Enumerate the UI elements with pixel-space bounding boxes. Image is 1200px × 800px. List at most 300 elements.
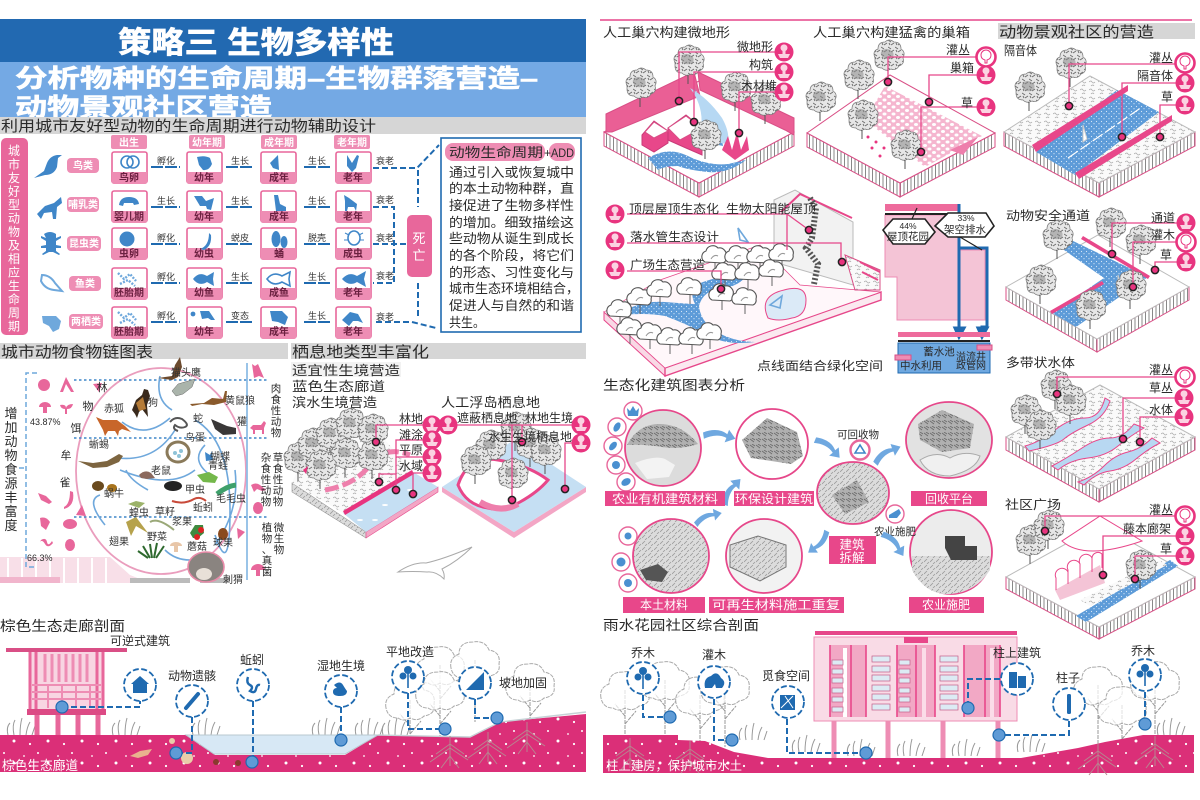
callout: flat land: 平地改造 bbox=[386, 645, 434, 659]
arrows and stage labels: 衰老 bbox=[376, 155, 394, 166]
water bands bbox=[1025, 398, 1160, 485]
circle: fertilising bbox=[910, 510, 992, 594]
trees bbox=[1016, 510, 1156, 589]
stage headers: 老年期 bbox=[337, 136, 367, 149]
iso block: blue corridor: 滩涂 bbox=[399, 427, 423, 442]
title: 策略三 生物多样性 bbox=[118, 27, 394, 60]
apartment building bbox=[814, 633, 1017, 721]
flow arrows bbox=[693, 430, 909, 559]
fertilising small label: 农业施肥 bbox=[874, 525, 916, 538]
water bbox=[648, 86, 746, 172]
y axis label: 增 bbox=[4, 406, 18, 421]
description heading: + bbox=[544, 146, 551, 160]
samara bbox=[126, 517, 148, 536]
water bbox=[615, 264, 755, 343]
heading: habitat types: 栖息地类型丰富化 bbox=[292, 343, 429, 361]
right axis labels: 性 bbox=[261, 473, 271, 486]
nest bbox=[167, 442, 189, 462]
habitat subheadings: 适宜性生境营造 bbox=[292, 363, 400, 378]
blue drain pipes with arrows bbox=[955, 204, 987, 337]
habitat subheadings: 滨水生境营造 bbox=[292, 395, 377, 410]
row: fish bbox=[41, 268, 371, 299]
panel: community plaza: 草 bbox=[1160, 542, 1172, 556]
arrows and stage labels: 生长 bbox=[231, 155, 249, 166]
row: fish: 胚胎期 bbox=[114, 286, 144, 299]
death pill: 死 bbox=[412, 231, 426, 246]
callout: elevated drainage 33%: 33% bbox=[957, 213, 975, 223]
hedgehog bbox=[188, 552, 224, 582]
labels: 生物太阳能屋顶 bbox=[726, 201, 816, 216]
callout lines bbox=[643, 679, 1145, 753]
animal labels: 翅果 bbox=[109, 535, 129, 548]
trophic grid bbox=[19, 363, 269, 580]
vertical label strip: 城 bbox=[8, 144, 20, 158]
cistern: 中水利用 bbox=[900, 359, 942, 372]
right axis labels: 食 bbox=[273, 462, 284, 475]
icon: roof bbox=[606, 204, 624, 224]
barriers bbox=[1032, 85, 1172, 179]
lizard bbox=[78, 454, 123, 468]
icons bbox=[1176, 54, 1194, 72]
panel: micro terrain: 木材堆 bbox=[741, 79, 777, 93]
fox bbox=[96, 417, 131, 436]
iso block base bbox=[1006, 385, 1195, 502]
y axis label: 加 bbox=[4, 420, 18, 435]
animal labels: 黄鼠狼 bbox=[225, 394, 255, 407]
section heading: 棕色生态走廊剖面 bbox=[0, 618, 125, 634]
right axis labels: 食 bbox=[271, 393, 282, 406]
callout: animal remains: 动物遗骸 bbox=[168, 669, 216, 683]
caterpillar bbox=[217, 485, 236, 494]
row: fish: 幼鱼 bbox=[194, 286, 214, 299]
callout: stilt building: 柱上建筑 bbox=[993, 645, 1041, 660]
frog bbox=[197, 472, 218, 483]
arrows and stage labels: 生长 bbox=[231, 271, 249, 282]
arrows and stage labels: 生长 bbox=[157, 195, 175, 206]
right axis labels: 性 bbox=[271, 404, 281, 417]
callout: roof garden 44% bbox=[883, 208, 935, 244]
panel: rainwater section diagram bbox=[757, 204, 994, 373]
description body: 城市生态环境相结合， bbox=[449, 281, 579, 296]
arrows and stage labels: 衰老 bbox=[376, 311, 394, 322]
right axis labels: 动 bbox=[273, 485, 283, 497]
y axis label: 食 bbox=[4, 462, 18, 477]
demolition label: 建筑 bbox=[839, 537, 865, 552]
right axis labels: 菌 bbox=[262, 566, 272, 578]
circle: recycling platform bbox=[906, 402, 992, 478]
earthworm bbox=[172, 498, 206, 503]
heading: lifecycle section: 利用城市友好型动物的生命周期进行动物辅助设计 bbox=[1, 117, 376, 135]
heading: habitat types bbox=[291, 343, 586, 361]
right axis labels: 食 bbox=[261, 462, 272, 475]
arrows and stage labels: 生长 bbox=[308, 195, 326, 206]
callout: pillar: 柱子 bbox=[1056, 670, 1080, 685]
callout: elevated drainage 33% bbox=[935, 213, 994, 250]
icon: downpipe bbox=[606, 232, 624, 250]
description body: 些动物从诞生到成长 bbox=[449, 231, 574, 246]
icons bbox=[1176, 506, 1194, 526]
labels: 广场生态营造 bbox=[630, 258, 705, 272]
row: mammals: 幼年 bbox=[194, 210, 214, 223]
arrows and stage labels: 变态 bbox=[231, 310, 249, 321]
callout: tree left: 乔木 bbox=[631, 646, 655, 660]
labels: 灌丛 bbox=[1149, 51, 1173, 65]
arrows and stage labels: 孵化 bbox=[157, 155, 175, 166]
label bars: 回收平台 bbox=[925, 491, 973, 506]
panel: rain garden section bbox=[601, 618, 1194, 775]
icons bbox=[774, 42, 794, 62]
iso block: floating island: 遮蔽栖息地 bbox=[457, 410, 517, 425]
iso block: floating island: 水生生境栖息地 bbox=[488, 429, 572, 444]
iso block: floating island: 林地生境 bbox=[525, 410, 573, 425]
animal labels: 蚯蚓 bbox=[193, 502, 213, 514]
row: amphibians bbox=[42, 307, 371, 338]
row: birds bbox=[34, 152, 371, 184]
callout: pillar bbox=[993, 670, 1085, 741]
row: birds: 鸟卵 bbox=[119, 171, 139, 184]
heading: 多带状水体 bbox=[1006, 356, 1076, 370]
leaders bbox=[679, 52, 775, 133]
stage headers: 成年期 bbox=[264, 136, 294, 149]
panel: animal landscape community bbox=[998, 23, 1195, 197]
small material icons bbox=[604, 402, 904, 592]
panel: micro terrain bbox=[603, 25, 794, 197]
dashed links to death bbox=[373, 145, 439, 328]
row: amphibians: 胚胎期 bbox=[114, 325, 144, 338]
panel: ecological building diagram bbox=[603, 378, 992, 613]
animal labels: 野菜 bbox=[147, 531, 167, 543]
panel: multi-band water: 草丛 bbox=[1149, 381, 1173, 395]
arrows and stage labels: 衰老 bbox=[376, 232, 394, 243]
cistern bbox=[895, 332, 992, 373]
vertical label strip: 型 bbox=[8, 198, 20, 212]
animal labels: 浆果 bbox=[172, 515, 192, 528]
arrows and stage labels bbox=[151, 155, 394, 322]
callout: slope bbox=[459, 667, 547, 724]
panel: animal landscape community: 草 bbox=[1161, 90, 1173, 104]
reversible building bbox=[6, 648, 127, 735]
row: insects: 幼虫 bbox=[194, 247, 214, 260]
callout: tree left bbox=[627, 646, 676, 723]
panel: animal safe passage bbox=[1006, 208, 1196, 352]
row: birds: 老年 bbox=[343, 171, 363, 184]
arrows and stage labels: 孵化 bbox=[157, 271, 175, 282]
stage headers bbox=[111, 135, 370, 149]
mushroom bbox=[170, 542, 182, 552]
panel: food chain chart bbox=[0, 357, 285, 586]
row: fish: 老年 bbox=[343, 286, 363, 299]
right axis labels: 真 bbox=[262, 554, 272, 567]
ring characters bbox=[60, 380, 108, 489]
iso block: blue corridor bbox=[284, 408, 442, 538]
heading bbox=[998, 23, 1195, 41]
right axis labels: 物 bbox=[271, 426, 281, 439]
death pill: 亡 bbox=[412, 248, 426, 263]
circle: demolition bbox=[817, 462, 889, 524]
right axis labels: 生 bbox=[274, 532, 284, 545]
ground and water bbox=[0, 712, 586, 772]
snake bbox=[170, 418, 187, 431]
labels: 通道 bbox=[1151, 211, 1175, 225]
labels: 灌丛 bbox=[1149, 363, 1173, 377]
label bars: 农业施肥 bbox=[922, 598, 970, 612]
row: amphibians: 幼年 bbox=[194, 325, 214, 338]
leaders bbox=[627, 214, 841, 289]
arrows and stage labels: 孵化 bbox=[157, 310, 175, 321]
right axis labels: 微 bbox=[274, 521, 285, 534]
caption: 点线面结合绿化空间 bbox=[757, 358, 883, 373]
trees bbox=[1026, 208, 1156, 329]
animal labels: 猫头鹰 bbox=[171, 366, 201, 379]
grass seed bbox=[150, 521, 174, 530]
right axis labels: 草 bbox=[273, 452, 283, 464]
callout: roof garden 44%: 屋顶花园 bbox=[887, 230, 929, 243]
icons bbox=[1176, 368, 1194, 386]
heading: 生态化建筑图表分析 bbox=[603, 378, 745, 393]
panel: community plaza bbox=[1005, 497, 1195, 639]
callout: elevated drainage 33%: 架空排水 bbox=[944, 223, 986, 236]
ground bbox=[603, 735, 1194, 775]
bridge backdrop bbox=[0, 557, 230, 583]
arrows and stage labels: 生长 bbox=[308, 155, 326, 166]
arrows and stage labels: 蜕皮 bbox=[231, 232, 249, 243]
pergola bbox=[1055, 565, 1105, 600]
iso block base bbox=[1004, 76, 1195, 197]
owl bbox=[158, 357, 182, 380]
snail bbox=[92, 481, 104, 491]
callout: shrub: 灌木 bbox=[702, 648, 726, 662]
heading: food chain bbox=[0, 343, 288, 361]
animal labels: 甲虫 bbox=[185, 484, 205, 496]
subtitle: 动物景观社区营造 bbox=[15, 94, 272, 122]
y axis label: 动 bbox=[4, 434, 18, 449]
callout: shrub bbox=[698, 648, 738, 746]
panel: raptor nest box bbox=[806, 25, 996, 197]
iso block base bbox=[1006, 525, 1195, 639]
habitat subheadings: 人工浮岛栖息地 bbox=[441, 395, 540, 410]
row: mammals bbox=[37, 191, 371, 223]
houses bbox=[642, 115, 702, 155]
y axis label: 物 bbox=[4, 448, 18, 463]
percent 43.87: 43.87% bbox=[30, 417, 61, 427]
description body: 的形态、习性变化与 bbox=[449, 265, 574, 280]
heading: lifecycle section bbox=[0, 117, 586, 135]
panel: lifecycle description bbox=[441, 138, 581, 332]
row: mammals: 成年 bbox=[269, 210, 289, 223]
iso block: blue corridor: 水域 bbox=[399, 459, 423, 473]
vertical label strip: 生 bbox=[8, 279, 20, 293]
row: insects: 成虫 bbox=[343, 247, 363, 260]
arrows and stage labels: 生长 bbox=[308, 310, 326, 321]
right axis labels: 杂 bbox=[261, 452, 271, 464]
vertical label strip: 相 bbox=[8, 252, 20, 266]
panel: brown corridor section bbox=[0, 618, 586, 773]
section trees bbox=[7, 642, 554, 762]
beetle bbox=[164, 481, 182, 491]
callout lines bbox=[62, 693, 497, 762]
pink consumer icons right bbox=[250, 364, 266, 576]
heading: 动物景观社区的营造 bbox=[999, 24, 1154, 41]
badger bbox=[211, 419, 236, 435]
ring characters: 牟 bbox=[60, 448, 72, 462]
y axis label: 富 bbox=[4, 504, 18, 519]
right axis labels: 物 bbox=[274, 543, 284, 556]
right axis labels: 性 bbox=[273, 473, 283, 486]
ring characters: 雀 bbox=[60, 476, 70, 489]
animal labels: 鸟蛋 bbox=[185, 431, 205, 444]
label bars: 环保设计建筑 bbox=[735, 491, 813, 506]
building bbox=[774, 190, 853, 285]
description body bbox=[449, 165, 579, 330]
wall bbox=[606, 72, 794, 135]
planting bbox=[1080, 560, 1167, 606]
leaders bbox=[1045, 516, 1176, 579]
panel: habitat diagrams bbox=[284, 362, 590, 579]
animal labels: 蘑菇 bbox=[187, 540, 207, 553]
description body: 的增加。细致描绘这 bbox=[449, 215, 574, 230]
building silhouette bbox=[885, 215, 985, 320]
ring characters: 林 bbox=[96, 380, 108, 394]
trees bbox=[601, 662, 1185, 767]
label bars: 农业有机建筑材料 bbox=[612, 491, 718, 506]
circle: local materials bbox=[633, 519, 709, 593]
description heading: 动物生命周期 bbox=[449, 145, 543, 160]
row: insects: 昆虫类 bbox=[69, 237, 99, 250]
description body: 的各个阶段，将它们 bbox=[449, 248, 574, 263]
arrows and stage labels: 生长 bbox=[231, 195, 249, 206]
trees bbox=[626, 45, 781, 159]
labels bbox=[629, 201, 816, 272]
windows bbox=[832, 656, 958, 712]
row: birds: 鸟类 bbox=[73, 159, 93, 172]
ring characters: 物 bbox=[82, 399, 94, 413]
wild herb bbox=[138, 543, 164, 558]
demolition label: 拆解 bbox=[839, 550, 865, 565]
animal labels: 草籽 bbox=[155, 506, 175, 518]
callout: flat land bbox=[386, 645, 451, 735]
pink resource icons left bbox=[38, 377, 77, 551]
animal labels: 獾 bbox=[237, 416, 247, 428]
vertical label strip: 物 bbox=[8, 225, 20, 239]
bird shapes bbox=[738, 228, 782, 308]
vertical label strip: 命 bbox=[8, 292, 20, 306]
leaders bbox=[888, 57, 977, 152]
top pink rule bbox=[600, 19, 1192, 21]
row: birds: 成年 bbox=[269, 171, 289, 184]
food cycle ring bbox=[76, 368, 246, 574]
arrows and stage labels: 衰老 bbox=[376, 270, 394, 281]
labels: 顶层屋顶生态化 bbox=[629, 202, 719, 216]
callout: wetland bbox=[317, 658, 365, 746]
right axis labels: 植 bbox=[262, 521, 273, 534]
habitat subheadings bbox=[291, 362, 540, 410]
buried fauna bbox=[130, 738, 241, 766]
right axis labels: 动 bbox=[271, 416, 281, 428]
trees bbox=[806, 40, 921, 169]
vertical label strip: 应 bbox=[8, 264, 20, 280]
iso block base bbox=[1006, 235, 1189, 352]
iso block: blue corridor: 平原 bbox=[399, 443, 423, 457]
labels: 灌丛 bbox=[1149, 503, 1173, 517]
stage headers: 幼年期 bbox=[192, 136, 222, 149]
animal labels: 蝗虫 bbox=[129, 506, 149, 519]
row: mammals: 老年 bbox=[343, 210, 363, 223]
animal labels: 球果 bbox=[213, 536, 233, 549]
circle: agricultural materials bbox=[625, 410, 701, 486]
panel: combined greening block bbox=[604, 190, 881, 376]
iso block base bbox=[807, 75, 995, 197]
vertical label strip: 友 bbox=[8, 171, 20, 185]
heading: food chain: 城市动物食物链图表 bbox=[1, 344, 153, 361]
subtitle: 分析物种的生命周期–生物群落营造– bbox=[15, 64, 538, 93]
habitat subheadings: 蓝色生态廊道 bbox=[292, 379, 385, 394]
dog bbox=[132, 389, 150, 418]
demolition label bbox=[829, 536, 876, 565]
leaders bbox=[1069, 64, 1176, 137]
roof layers bbox=[885, 204, 958, 215]
animals bbox=[78, 357, 236, 582]
row: mammals: 哺乳类 bbox=[68, 198, 98, 211]
callout: reversible building bbox=[56, 633, 170, 713]
heading: 人工巢穴构建猛禽的巢箱 bbox=[813, 25, 970, 40]
vertical label strip: 期 bbox=[8, 320, 20, 334]
animal labels: 狗 bbox=[148, 396, 158, 409]
callout: reversible building: 可逆式建筑 bbox=[110, 633, 170, 648]
row: fish: 成鱼 bbox=[269, 286, 289, 299]
mouse bbox=[139, 471, 155, 479]
labels: 灌丛 bbox=[946, 43, 970, 57]
heading: 动物安全通道 bbox=[1006, 208, 1091, 223]
callout: slope: 坡地加固 bbox=[499, 676, 547, 690]
callout: tree right bbox=[1129, 644, 1161, 730]
row: insects: 虫卵 bbox=[119, 247, 139, 260]
trees bbox=[1011, 370, 1086, 449]
panel: animal safe passage: 灌木 bbox=[1151, 228, 1175, 242]
iso block base bbox=[604, 81, 794, 197]
arrows and stage labels: 生长 bbox=[308, 271, 326, 282]
row: amphibians: 成年 bbox=[269, 325, 289, 338]
food web arrows bbox=[94, 376, 236, 560]
description body: 促进人与自然的和谐 bbox=[449, 298, 574, 313]
row: birds: 幼年 bbox=[194, 171, 214, 184]
description heading: ADD bbox=[551, 146, 574, 160]
y axis label: 丰 bbox=[4, 490, 18, 505]
label bars: 可再生材料施工重复 bbox=[712, 598, 840, 612]
heading: 人工巢穴构建微地形 bbox=[603, 25, 730, 40]
right axis labels: 动 bbox=[261, 485, 271, 497]
right axis labels: 、 bbox=[262, 544, 272, 556]
icon: recycling bbox=[850, 440, 870, 460]
labels: 微地形 bbox=[737, 40, 773, 54]
row: amphibians: 老年 bbox=[343, 325, 363, 338]
row: insects bbox=[41, 228, 371, 260]
berries bbox=[190, 525, 204, 538]
arrows and stage labels: 衰老 bbox=[376, 194, 394, 205]
bird sketch bbox=[398, 547, 472, 579]
sound barrier label: 隔音体 bbox=[1004, 43, 1037, 58]
subtitle bbox=[15, 64, 538, 122]
animal labels: 蜥蜴 bbox=[89, 438, 109, 451]
recyclables label: 可回收物 bbox=[837, 428, 879, 441]
woodpile bbox=[722, 132, 749, 160]
heading: 雨水花园社区综合剖面 bbox=[603, 618, 759, 633]
pink planting bbox=[866, 136, 886, 158]
icons bbox=[976, 48, 996, 66]
corridor caption: 棕色生态廊道 bbox=[2, 758, 78, 773]
iso block: blue corridor: 林地 bbox=[399, 412, 423, 426]
description body: 通过引入或恢复城中 bbox=[449, 165, 574, 180]
blue strip bbox=[1076, 560, 1178, 622]
